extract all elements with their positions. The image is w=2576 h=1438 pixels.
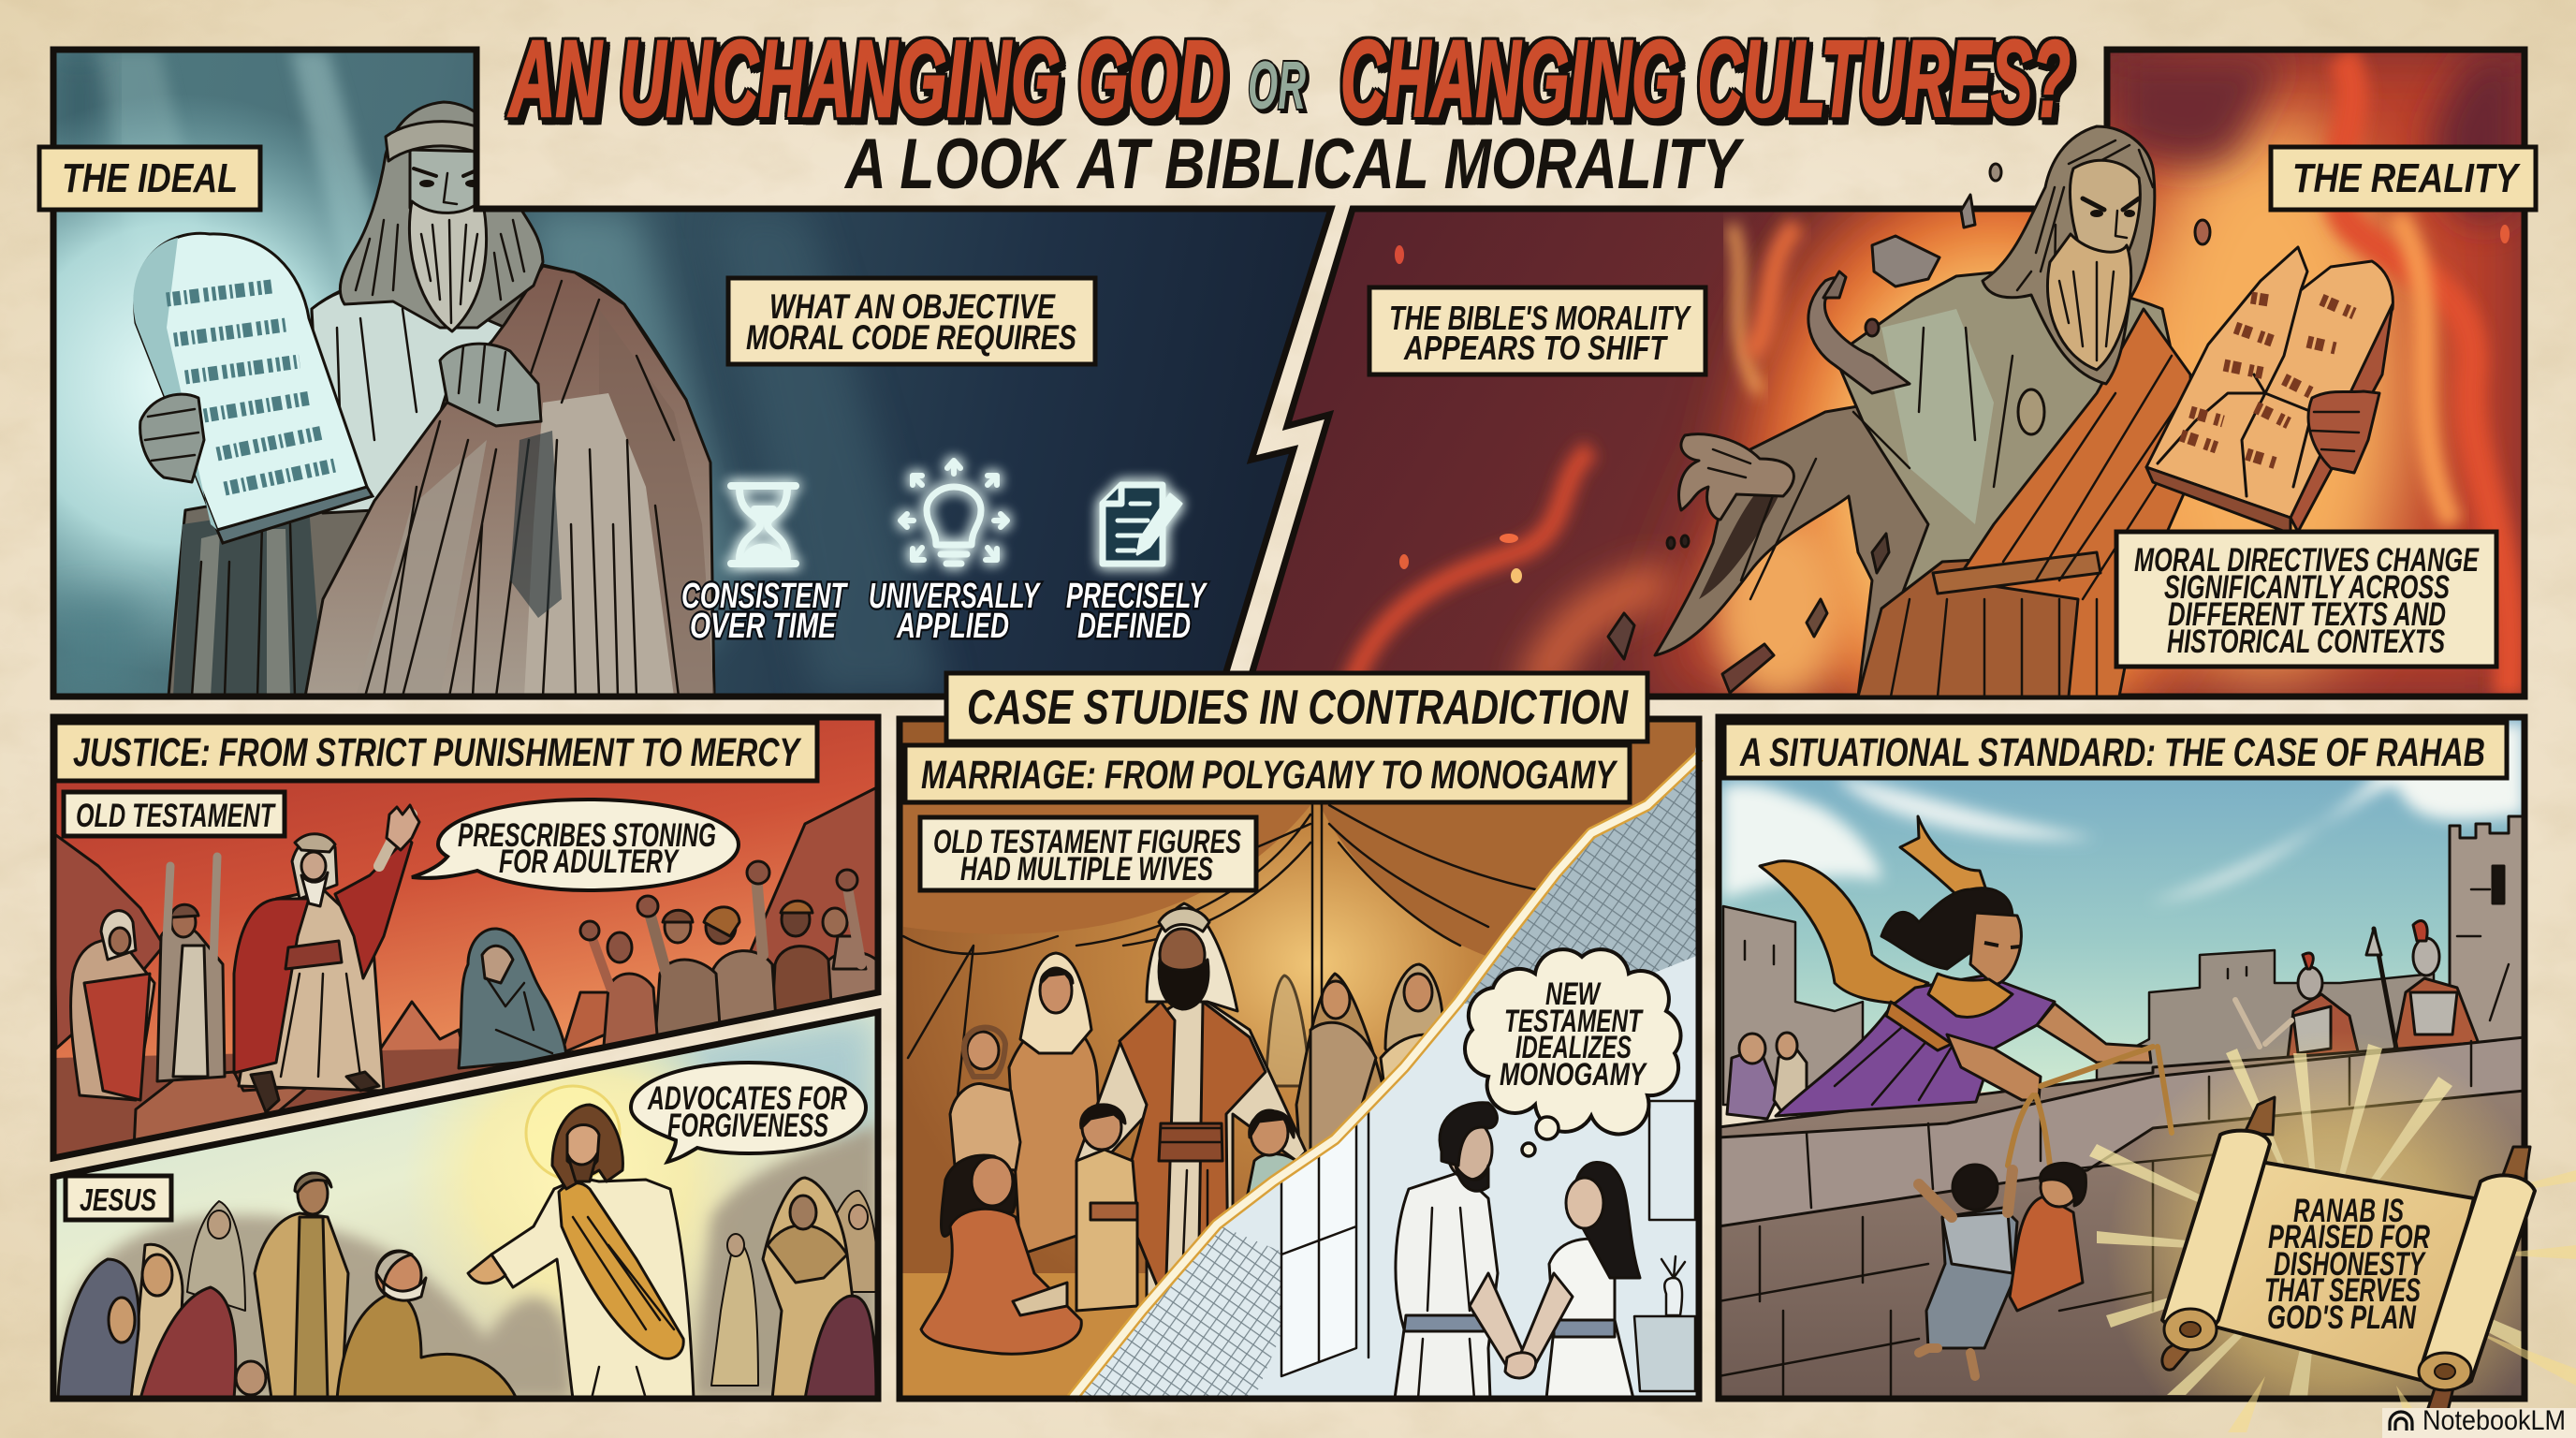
prophet xyxy=(234,805,419,1112)
icon label: precisely: PRECISELY xyxy=(1066,577,1208,616)
label: the reality xyxy=(2271,147,2536,210)
jesus xyxy=(468,1105,694,1399)
rays spilling past the frame xyxy=(2228,1170,2576,1438)
panel: the ideal xyxy=(0,50,1336,697)
panel: rahab xyxy=(1719,717,2576,1438)
subtitle: A LOOK AT BIBLICAL MORALITY xyxy=(843,125,1745,204)
woman in white xyxy=(1518,1162,1640,1399)
caption: objective moral code: WHAT AN OBJECTIVE xyxy=(769,287,1056,326)
woman, right group xyxy=(763,1178,876,1399)
label: the ideal xyxy=(39,147,260,210)
speech bubble: prescribes stoning: PRESCRIBES STONING xyxy=(458,817,716,854)
old testament label xyxy=(64,792,285,836)
jesus label: JESUS xyxy=(80,1182,156,1217)
icon label: consistent: CONSISTENT xyxy=(681,577,848,616)
justice header: JUSTICE: FROM STRICT PUNISHMENT TO MERCY xyxy=(73,730,801,775)
thought bubble xyxy=(1465,949,1681,1156)
marriage header: MARRIAGE: FROM POLYGAMY TO MONOGAMY xyxy=(921,753,1617,798)
icon: document and pen xyxy=(1103,485,1181,564)
seated wife xyxy=(921,1155,1081,1354)
background wives xyxy=(1266,964,1451,1170)
thought bubble: MONOGAMY xyxy=(1500,1057,1647,1093)
girl xyxy=(1247,1110,1296,1198)
scroll: GOD'S PLAN xyxy=(2267,1299,2417,1336)
soldiers xyxy=(2235,920,2481,1064)
caption: moral directives change: HISTORICAL CONTEXTS xyxy=(2167,624,2445,660)
caption: moral directives change: SIGNIFICANTLY ACROSS xyxy=(2164,569,2450,606)
head, hair and beard xyxy=(340,102,543,331)
hand gripping tablet xyxy=(140,394,204,482)
man in white xyxy=(1395,1103,1526,1399)
tablet of stone xyxy=(133,233,373,543)
icon label: precisely xyxy=(1066,577,1208,646)
flying stone fragments xyxy=(1608,164,2210,693)
thought bubble: TESTAMENT xyxy=(1504,1004,1644,1039)
caption: morality appears to shift: APPEARS TO SHIFT xyxy=(1403,329,1668,367)
icon label: universally xyxy=(869,577,1041,646)
light rays xyxy=(2089,1030,2555,1438)
title: AN UNCHANGING GOD xyxy=(507,18,1224,139)
icon label: universally: APPLIED xyxy=(896,607,1009,646)
caption: morality appears to shift: THE BIBLE'S MORALITY xyxy=(1389,299,1691,337)
caption: moral directives change: DIFFERENT TEXTS AND xyxy=(2168,596,2446,633)
scroll: THAT SERVES xyxy=(2264,1272,2421,1309)
jesus scene xyxy=(53,1002,878,1399)
left onlookers xyxy=(71,857,225,1100)
wall xyxy=(1719,1037,2525,1399)
patriarch xyxy=(1076,903,1306,1311)
caption: morality appears to shift xyxy=(1369,287,1705,374)
rahab figure xyxy=(1760,816,2151,1116)
woman, left group xyxy=(58,1244,266,1399)
title connector word: OR xyxy=(1248,49,1306,124)
jesus label xyxy=(66,1176,171,1220)
modern scene xyxy=(1058,749,1704,1404)
panel: the reality xyxy=(1245,50,2527,749)
speech bubble: advocates for forgiveness: FORGIVENESS xyxy=(667,1108,828,1144)
icon: hourglass xyxy=(731,486,796,564)
section banner: case studies: CASE STUDIES IN CONTRADICTION xyxy=(967,681,1629,735)
kneeling woman xyxy=(459,929,566,1068)
left bystanders xyxy=(1727,1033,1807,1119)
wall mirror xyxy=(1649,1101,1695,1220)
thought bubble: IDEALIZES xyxy=(1515,1030,1632,1065)
scroll xyxy=(2162,1097,2535,1423)
caption: multiple wives: HAD MULTIPLE WIVES xyxy=(960,851,1213,888)
title: CHANGING CULTURES? xyxy=(1340,18,2071,139)
rope xyxy=(2008,1047,2172,1166)
boy xyxy=(1076,1105,1137,1311)
speech bubble: prescribes stoning xyxy=(412,800,739,890)
scroll: RANAB IS xyxy=(2293,1193,2404,1229)
scroll: PRAISED FOR xyxy=(2268,1219,2431,1255)
caption: objective moral code: MORAL CODE REQUIRES xyxy=(746,318,1076,357)
caption: multiple wives xyxy=(920,817,1256,890)
section banner: case studies xyxy=(946,673,1647,741)
standing wife xyxy=(1009,953,1105,1255)
tablet cracked xyxy=(2146,247,2393,534)
caption: objective moral code xyxy=(728,278,1095,364)
head with wild hair xyxy=(1983,126,2155,384)
flaming backdrop xyxy=(1245,50,2527,749)
background crowd xyxy=(187,1191,878,1386)
icon label: precisely: DEFINED xyxy=(1077,607,1191,646)
icon label: consistent: OVER TIME xyxy=(690,607,837,646)
raging crowd xyxy=(580,861,876,1105)
window xyxy=(1281,1086,1368,1376)
scroll: DISHONESTY xyxy=(2274,1246,2426,1283)
marriage header xyxy=(905,745,1630,802)
seated man xyxy=(337,1251,517,1399)
standing man xyxy=(255,1173,348,1399)
panel: marriage xyxy=(900,719,1704,1404)
label: the ideal: THE IDEAL xyxy=(62,155,238,201)
label: the reality: THE REALITY xyxy=(2292,155,2521,201)
tower xyxy=(2450,816,2525,1049)
children climbing xyxy=(1919,1163,2086,1376)
side table and vase xyxy=(1634,1256,1695,1391)
sky and clouds xyxy=(1719,717,2525,1092)
old testament scene xyxy=(53,717,878,1170)
glowing crack between eras xyxy=(1072,756,1699,1399)
icon label: universally: UNIVERSALLY xyxy=(869,577,1041,616)
old testament label: OLD TESTAMENT xyxy=(76,798,276,834)
fist at chest xyxy=(440,344,541,426)
caption: moral directives change xyxy=(2116,532,2496,667)
caption: multiple wives: OLD TESTAMENT FIGURES xyxy=(933,824,1241,860)
outstretched hand xyxy=(1679,434,1793,520)
city buildings xyxy=(1723,906,2434,1105)
speech bubble: advocates for forgiveness: ADVOCATES FOR xyxy=(647,1080,848,1117)
justice header xyxy=(55,723,817,781)
speech bubble: advocates for forgiveness xyxy=(631,1063,866,1162)
icon: light bulb with arrows xyxy=(900,461,1007,564)
figure: crumbling Moses with cracked tablet xyxy=(1655,271,2195,697)
ideal panel backdrop with light streaks xyxy=(0,50,1336,697)
icon label: consistent xyxy=(681,577,848,646)
figure: Moses serene, holding the glowing tablet xyxy=(133,102,714,697)
tent scene xyxy=(900,719,1699,1399)
panel: justice xyxy=(53,717,878,1399)
thought bubble: NEW xyxy=(1545,976,1602,1012)
speech bubble: prescribes stoning: FOR ADULTERY xyxy=(499,844,680,880)
child left xyxy=(950,1028,1020,1170)
